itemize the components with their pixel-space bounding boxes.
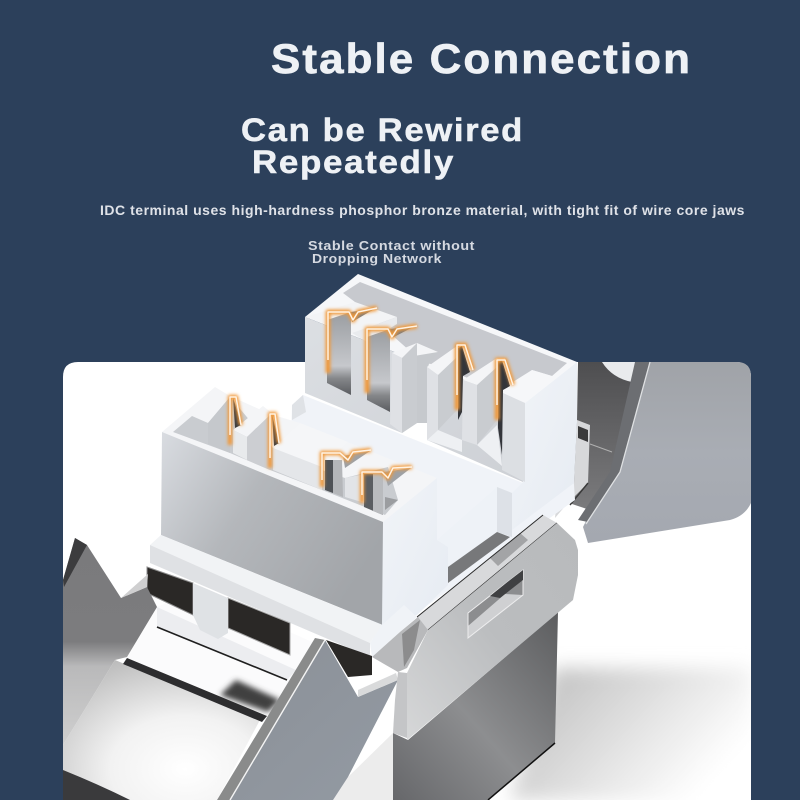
subheading: stable contact: Stable Contact without (308, 238, 475, 253)
tooth 6 (502, 370, 552, 482)
lower right face (382, 528, 448, 625)
heading: can be rewired repeatedly (241, 112, 524, 180)
shadow below base (220, 680, 280, 712)
base window 3 (326, 640, 372, 677)
white product panel (63, 362, 751, 800)
dark housing box (393, 612, 558, 800)
lower top surface (162, 388, 292, 484)
tooth 2 inner (352, 317, 397, 342)
tooth 5 (462, 358, 513, 466)
subheading: stable contact (308, 238, 475, 266)
copper contacts upper (328, 308, 513, 420)
metal side plate (407, 523, 578, 740)
base tab (193, 583, 228, 639)
lower tooth 1 face (208, 397, 230, 453)
upper cavity (343, 282, 567, 390)
description text: IDC terminal uses high-hardness phosphor bronze material, with tight fit of wire core jaws (100, 203, 745, 218)
heading: can be rewired repeatedly: Can be Rewired (241, 112, 524, 148)
channel (417, 358, 430, 423)
upper right face (522, 362, 577, 484)
base window 2 (228, 598, 290, 655)
product: keystone connector (63, 274, 751, 800)
copper contacts lower (230, 397, 412, 503)
subheading: stable contact: Dropping Network (312, 251, 442, 266)
bottom left plate (63, 660, 260, 800)
metal rail (416, 514, 558, 630)
floor between blocks (290, 395, 575, 640)
base plate of lower housing (150, 535, 417, 657)
heading: can be rewired repeatedly: Repeatedly (252, 144, 455, 180)
plate dark strip (123, 658, 267, 722)
upper front face (305, 317, 525, 482)
central flap folded edge (217, 638, 325, 800)
upper top surface (305, 274, 577, 403)
plate window (468, 570, 523, 638)
base window 1 (147, 567, 193, 615)
upper slots (327, 308, 510, 455)
right flap interior (570, 362, 635, 508)
lower cavity (173, 397, 398, 515)
bottom left corner (63, 770, 130, 800)
housing step and channel (448, 487, 512, 583)
right flap folded edge (578, 362, 650, 522)
tooth 4 (427, 345, 472, 452)
tooth 3 (390, 343, 438, 433)
metal clip (555, 420, 590, 518)
lower raised block (273, 448, 322, 490)
white body below base (127, 590, 330, 715)
floor shadow (510, 668, 751, 800)
lower front face (161, 432, 383, 625)
title: Stable Connection (271, 35, 692, 82)
light floor (330, 733, 393, 800)
lower housing (161, 387, 448, 625)
left flap (63, 538, 157, 745)
upper housing (305, 274, 577, 484)
metal corner column (372, 617, 428, 738)
right flap (583, 362, 751, 543)
tooth 1 top (305, 302, 396, 324)
central flap (230, 640, 398, 800)
lower slots (233, 397, 411, 515)
floor step (292, 395, 306, 420)
lower tooth 2 (233, 406, 269, 460)
